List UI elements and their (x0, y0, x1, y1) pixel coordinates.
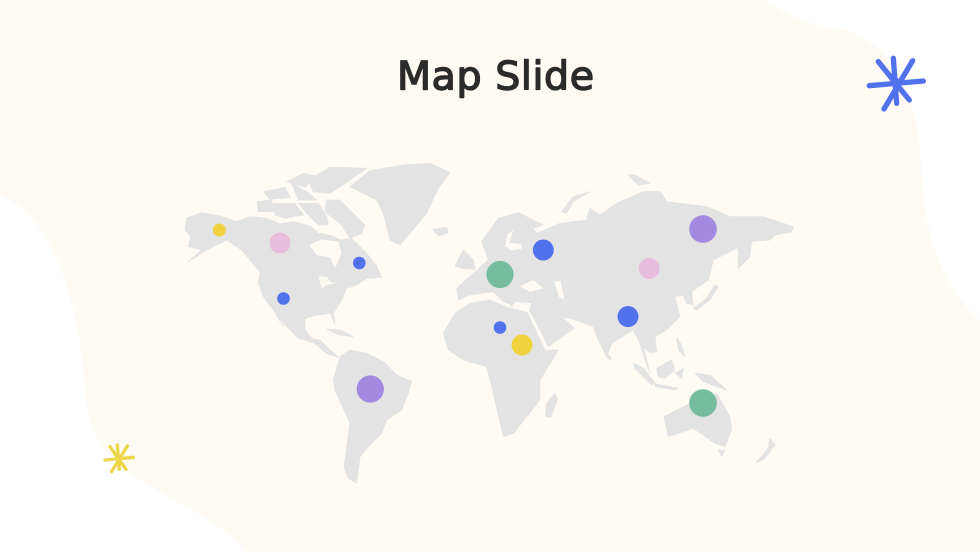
map: inland seas and bays (309, 230, 564, 299)
marker: Siberia (689, 215, 717, 243)
title: Map Slide (397, 54, 594, 100)
marker: China (618, 306, 638, 327)
icon: yellow asterisk (105, 445, 133, 472)
world map (185, 163, 793, 483)
map: Eurasia, Africa and Oceania (443, 175, 793, 463)
marker: Western Europe (486, 261, 514, 288)
marker: United States (277, 292, 290, 305)
data markers (213, 215, 717, 417)
marker: Alaska (213, 224, 226, 236)
marker: Quebec (353, 257, 366, 269)
map: Americas and Greenland (185, 163, 450, 483)
icon: blue asterisk (869, 58, 923, 109)
marker: Mongolia (639, 258, 660, 279)
Baltic, Black and Caspian seas (505, 230, 564, 299)
Hudson Bay and Great Lakes (309, 239, 342, 288)
marker: North Africa (494, 321, 506, 334)
marker: Brazil (357, 375, 384, 403)
marker: Russia west (533, 240, 554, 260)
marker: Central Africa (512, 334, 532, 356)
marker: Canada (270, 232, 290, 254)
marker: Australia (689, 389, 717, 417)
